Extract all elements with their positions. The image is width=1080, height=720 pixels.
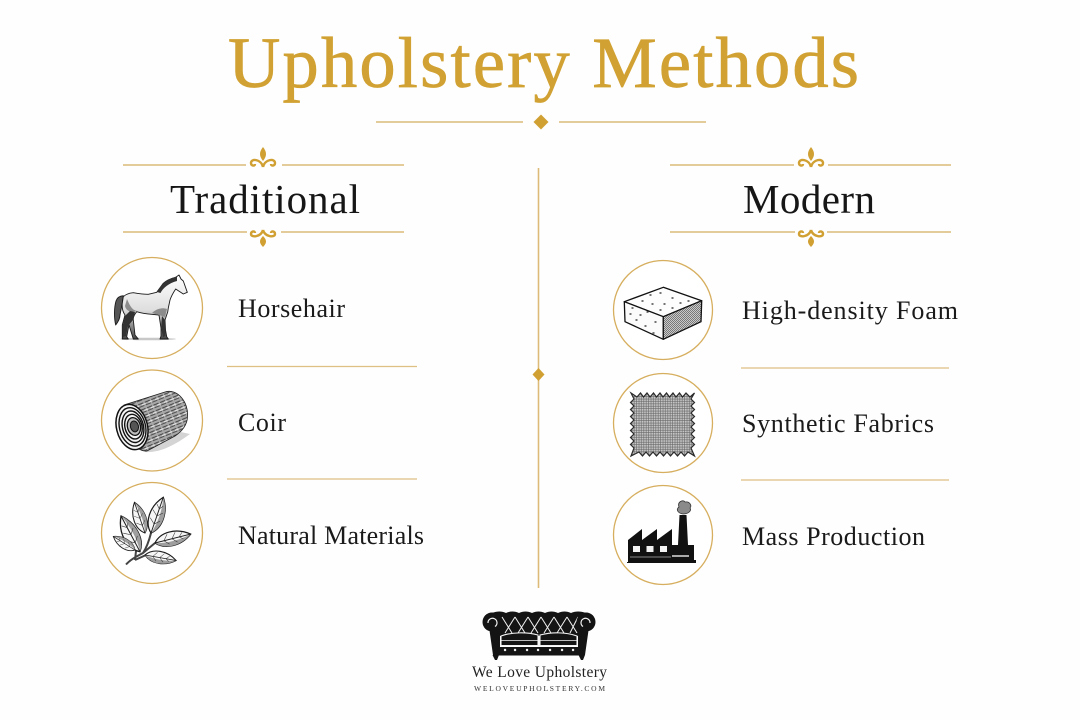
- item dividers: modern: [741, 368, 949, 480]
- label: synthetic fabrics: Synthetic Fabrics: [742, 409, 934, 438]
- icon: coir roll: [111, 391, 190, 453]
- label: high-density foam: High-density Foam: [742, 296, 958, 325]
- icon: chesterfield sofa: [482, 612, 596, 660]
- brand url: WELOVEUPHOLSTERY.COM: [474, 684, 605, 693]
- icon: fabric swatch: [630, 393, 694, 456]
- item: mass production: [614, 486, 925, 584]
- heading: modern: [670, 147, 951, 247]
- item: high-density foam: [614, 260, 958, 360]
- heading: traditional: [123, 147, 404, 247]
- item: synthetic fabrics: [614, 374, 934, 472]
- icon: horse: [114, 275, 187, 340]
- item: coir: [102, 370, 286, 471]
- heading: modern: Modern: [743, 176, 875, 222]
- icon: foam block: [624, 287, 702, 339]
- center vertical divider: [532, 168, 544, 588]
- panel: modern: [614, 147, 958, 584]
- icon: leaves: [111, 495, 192, 566]
- title divider: [376, 114, 706, 130]
- label: coir: Coir: [238, 408, 286, 437]
- item: horsehair: [102, 258, 345, 358]
- heading: traditional: Traditional: [170, 176, 360, 222]
- item: natural materials: [102, 482, 424, 584]
- panel: traditional: [102, 147, 424, 584]
- icon: factory: [627, 501, 696, 563]
- item dividers: traditional: [227, 366, 417, 479]
- brand name: We Love Upholstery: [472, 664, 607, 681]
- label: horsehair: Horsehair: [238, 294, 345, 323]
- label: mass production: Mass Production: [742, 522, 925, 551]
- label: natural materials: Natural Materials: [238, 521, 424, 550]
- logo: [472, 612, 607, 693]
- title: Upholstery Methods: [228, 22, 859, 103]
